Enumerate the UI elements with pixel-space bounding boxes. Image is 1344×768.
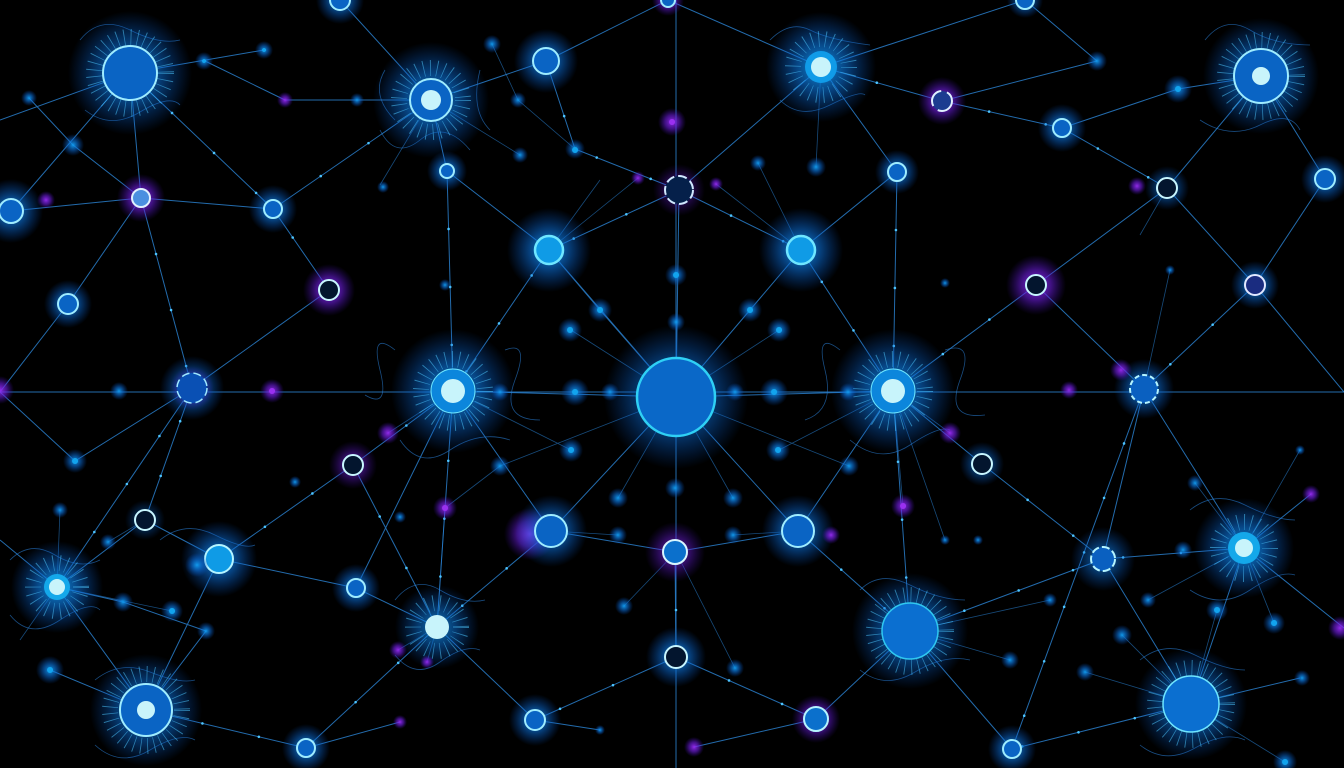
hub: 146,710 — [90, 654, 202, 766]
hub: top-right — [1203, 18, 1319, 134]
node: 273,209 — [249, 185, 297, 233]
node: 801,250 — [759, 208, 843, 292]
node: purple 1036,285 — [1006, 255, 1066, 315]
hub: 910,631 — [852, 573, 968, 689]
nodes: clipped at top edge — [316, 0, 1043, 24]
node: left edge — [0, 179, 43, 243]
hub: 1191,704 — [1135, 648, 1247, 760]
hub: lower-left — [11, 541, 103, 633]
node: 551,531 — [504, 495, 587, 567]
node: purple 141,198 — [117, 174, 165, 222]
node: 675,552 — [645, 522, 705, 582]
node: 1012,749 — [988, 725, 1036, 768]
node: 306,748 — [282, 724, 330, 768]
hub: left-center — [391, 329, 515, 453]
node: 447,171 — [427, 151, 467, 191]
node: 982,464 — [960, 442, 1004, 486]
node: purple 942,101 — [918, 77, 966, 125]
hub: central large disc — [604, 325, 748, 469]
node: 219,559 — [181, 521, 257, 597]
node: 535,720 — [509, 694, 561, 746]
node: 549,250 — [507, 208, 591, 292]
node: 353,465 — [329, 441, 377, 489]
node: 546,61 — [514, 29, 578, 93]
hub: top center-right — [766, 12, 876, 122]
node: 145,520 — [125, 500, 165, 540]
hub: right-center — [831, 329, 955, 453]
node: 816,719 — [792, 695, 840, 743]
node: 798,531 — [762, 495, 834, 567]
node: 68,304 — [44, 280, 92, 328]
node: 676,657 — [646, 627, 706, 687]
hub: 437,627 — [395, 585, 479, 669]
node: 1144,389 — [1114, 359, 1174, 419]
hub: upper left-center — [373, 42, 489, 158]
hub: top-left — [68, 11, 192, 135]
node: 192,388 — [160, 356, 224, 420]
node: top center white ring — [653, 164, 705, 216]
node: 897,172 — [875, 150, 919, 194]
node: purple 329,290 — [303, 264, 355, 316]
node: 1325,179 — [1301, 155, 1344, 203]
hub: 1244,548 — [1194, 498, 1294, 598]
dots along edges — [57, 61, 1255, 749]
node: 1255,285 — [1231, 261, 1279, 309]
node: 1062,128 — [1038, 104, 1086, 152]
node: 1103,559 — [1071, 527, 1135, 591]
node: 356,588 — [332, 564, 380, 612]
node: 1167,188 — [1145, 166, 1189, 210]
